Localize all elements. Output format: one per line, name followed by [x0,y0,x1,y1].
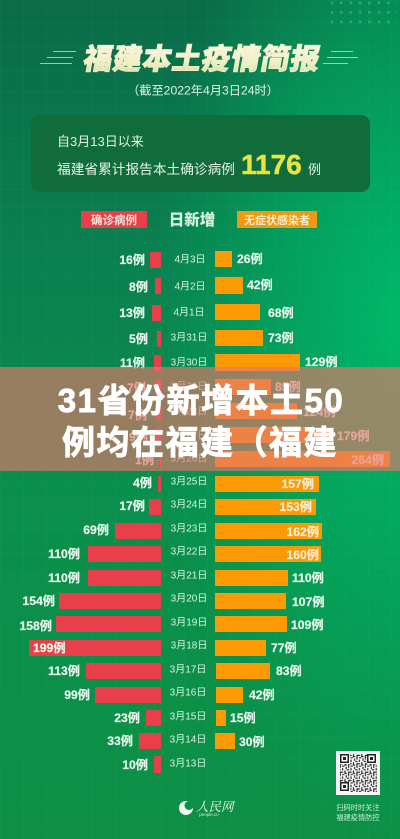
row 3月30日 [120,354,338,371]
row 3月14日: 33例 [107,733,133,748]
row 3月23日: 69例 [83,522,109,537]
row 3月18日: 3月18日 [171,640,207,652]
panel: cumulative total: 例 [308,162,321,177]
QR caption: 福建疫情防控 [336,813,380,822]
row 3月19日: 3月19日 [171,616,207,628]
row 3月20日: 3月20日 [171,592,207,604]
row 3月28日 [128,403,336,422]
legend: 无症状感染者 [244,213,310,227]
row 3月13日: 3月13日 [170,758,206,770]
row 3月18日 [29,640,297,656]
row 3月27日: 3月27日 [171,430,207,442]
row 3月30日: 3月30日 [171,356,207,368]
row 3月15日: 23例 [114,710,140,725]
row 3月19日 [19,616,324,633]
row 3月13日: 10例 [122,757,148,772]
row 3月28日: 3月28日 [171,406,207,418]
row 3月16日 [64,686,275,703]
legend: 确诊病例 [91,213,137,227]
row 3月22日: 160例 [286,547,319,562]
overlay banner [0,367,400,471]
row 3月14日: 3月14日 [170,734,206,746]
row 3月23日 [83,522,322,539]
row 3月23日: 3月23日 [171,522,207,534]
row 3月17日: 83例 [276,663,302,678]
panel: cumulative total: 福建省累计报告本土确诊病例 [57,162,235,177]
QR caption: 扫码时时关注 [336,803,380,812]
row 3月24日: 153例 [279,499,312,514]
row 3月29日: 7例 [127,380,146,395]
panel: cumulative total: 1176 [241,149,302,180]
logo: people.cn: 人民网 [196,797,236,815]
QR caption [336,803,380,822]
panel: cumulative total: 自3月13日以来 [57,134,144,149]
row 3月23日: 162例 [286,524,319,539]
row 3月26日: 3月26日 [171,452,207,464]
row 3月22日 [48,546,321,562]
row 3月14日 [107,733,265,749]
row 4月1日: 4月1日 [173,306,205,318]
row 4月2日: 42例 [247,277,273,292]
row 3月24日 [119,498,316,515]
bar chart: daily new cases [19,251,390,773]
row 4月3日: 16例 [119,252,145,267]
row 3月22日: 110例 [48,546,80,561]
row 3月17日: 3月17日 [170,664,206,676]
row 4月2日 [129,277,273,294]
row 3月21日 [48,570,324,586]
row 3月18日: 199例 [33,640,66,655]
row 4月3日: 4月3日 [174,254,206,266]
row 3月25日: 3月25日 [171,476,207,488]
row 3月27日: 9例 [129,429,148,444]
row 3月22日: 3月22日 [171,546,207,558]
row 3月17日 [48,663,302,679]
row 4月3日: 26例 [237,251,263,266]
row 3月20日: 107例 [292,594,325,609]
row 4月2日: 8例 [129,279,148,294]
logo: people.cn: people.cn [199,812,219,817]
row 3月31日: 3月31日 [171,332,207,344]
row 3月29日: 3月29日 [171,380,207,392]
legend [81,210,317,229]
row 3月27日 [129,427,370,444]
row 3月24日: 3月24日 [171,498,207,510]
title: 福建本土疫情简报 [81,43,323,76]
row 3月20日 [22,592,325,609]
row 3月13日 [122,756,206,773]
row 4月1日 [119,304,294,321]
row 3月16日: 3月16日 [170,686,206,698]
panel: cumulative total [31,115,370,192]
row 3月30日: 11例 [120,355,145,370]
row 3月31日 [129,330,294,347]
row 3月19日: 158例 [19,618,52,633]
row 3月27日: 179例 [337,428,370,443]
logo: people.cn [179,797,236,817]
row 3月31日: 5例 [129,331,148,346]
subtitle: （截至2022年4月3日24时） [127,84,279,98]
row 3月16日: 42例 [249,687,275,702]
row 3月29日 [127,379,301,396]
QR code [336,751,380,795]
row 3月21日: 110例 [48,570,80,585]
overlay banner: 31省份新增本土50 [58,382,344,419]
row 3月31日: 73例 [268,330,294,345]
row 3月25日: 4例 [133,475,152,490]
row 3月29日: 85例 [275,379,301,394]
row 3月25日: 157例 [281,476,314,491]
row 3月30日: 129例 [305,354,338,369]
row 3月26日 [135,451,390,468]
row 3月20日: 154例 [22,593,55,608]
row 3月25日 [133,475,319,492]
row 4月2日: 4月2日 [174,280,206,292]
legend: 日新增 [169,210,215,229]
row 3月15日 [114,710,256,726]
row 4月1日: 68例 [268,305,294,320]
row 3月24日: 17例 [119,498,145,513]
row 4月3日 [119,251,263,268]
row 3月15日: 3月15日 [170,710,206,722]
row 3月28日: 124例 [303,404,336,419]
row 3月19日: 109例 [291,617,324,632]
row 3月26日: 264例 [351,452,384,467]
row 3月26日: 1例 [135,452,154,467]
row 3月21日: 3月21日 [171,570,207,582]
row 3月18日: 77例 [271,640,297,655]
row 4月1日: 13例 [119,305,145,320]
overlay banner: 例均在福建（福建 [62,424,338,461]
row 3月15日: 15例 [230,710,256,725]
row 3月21日: 110例 [292,570,324,585]
row 3月14日: 30例 [239,734,265,749]
row 3月28日: 7例 [128,407,147,422]
row 3月16日: 99例 [64,687,90,702]
row 3月17日: 113例 [48,663,80,678]
